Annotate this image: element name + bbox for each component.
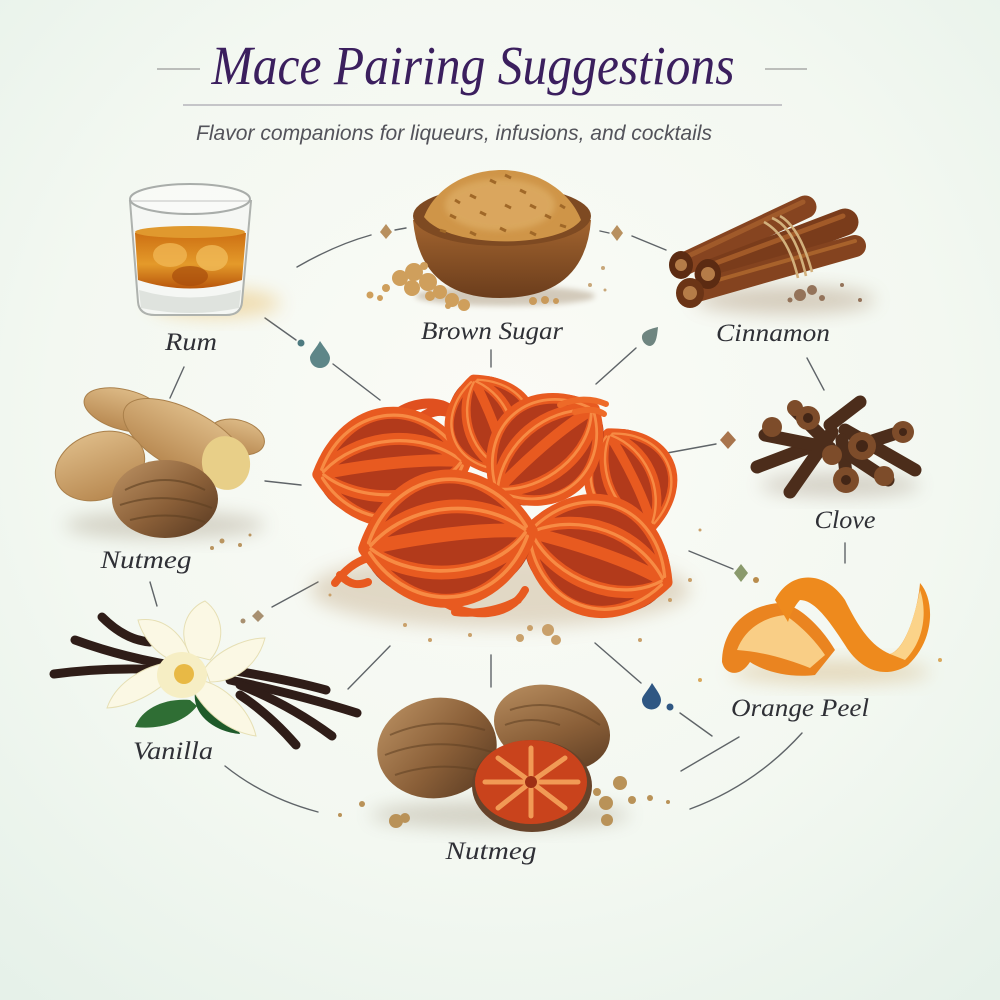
icon: brown sugar bowl	[366, 170, 606, 311]
label: Brown Sugar: Brown Sugar	[421, 318, 563, 345]
icon: central mace pile	[310, 363, 702, 645]
subtitle: Flavor companions for liqueurs, infusions, and cocktails	[196, 122, 712, 145]
title: Mace Pairing Suggestions	[211, 35, 735, 96]
icon: ginger and nutmeg	[45, 380, 268, 550]
icon: cinnamon sticks	[669, 202, 875, 314]
connector lines and markers	[150, 224, 845, 812]
icon: orange peel	[698, 578, 942, 684]
icon: vanilla pods and flower	[54, 601, 357, 745]
icon: nutmeg halves	[338, 672, 670, 832]
label: Rum: Rum	[164, 329, 217, 356]
label: Cinnamon: Cinnamon	[716, 320, 830, 347]
label: Orange Peel: Orange Peel	[731, 695, 869, 722]
icon: cloves	[757, 400, 920, 497]
mace lobes	[313, 363, 691, 633]
title block	[157, 35, 807, 145]
icon: rum glass	[130, 184, 280, 317]
label: Nutmeg (bottom): Nutmeg	[444, 838, 536, 865]
label: Clove: Clove	[814, 507, 876, 534]
label: Nutmeg (left): Nutmeg	[99, 547, 192, 574]
sugar crumbs	[366, 262, 470, 311]
label: Vanilla: Vanilla	[133, 738, 213, 765]
